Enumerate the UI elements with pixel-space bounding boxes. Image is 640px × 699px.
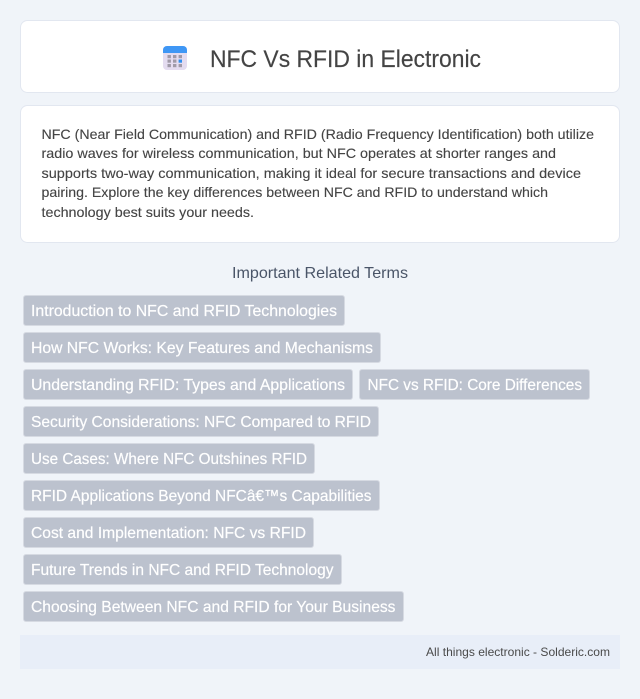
tag: how NFC works: How NFC Works: Key Features and Mechanisms xyxy=(31,340,373,357)
tag: choosing xyxy=(24,592,404,622)
heading: related terms: Important Related Terms xyxy=(232,265,408,282)
tag: introduction xyxy=(24,296,344,326)
tag: introduction: Introduction to NFC and RFID Technologies xyxy=(31,303,337,320)
tag: core differences: NFC vs RFID: Core Differences xyxy=(368,377,582,394)
tag: RFID applications xyxy=(24,480,380,510)
footer xyxy=(20,635,620,669)
intro text xyxy=(42,126,594,220)
intro text: NFC (Near Field Communication) and RFID (Radio Frequency Identification) both utilize xyxy=(42,126,594,142)
tag: future trends: Future Trends in NFC and RFID Technology xyxy=(31,562,334,579)
intro text: supports two-way communication, making it ideal for secure transactions and device xyxy=(42,165,581,181)
tag: cost xyxy=(24,518,314,548)
title: NFC Vs RFID in Electronic xyxy=(210,46,481,73)
icon: calendar xyxy=(163,46,187,70)
tag: future trends xyxy=(24,554,342,584)
intro text: pairing. Explore the key differences between NFC and RFID to understand which xyxy=(42,184,548,200)
tag: how NFC works xyxy=(24,332,380,362)
tag: choosing: Choosing Between NFC and RFID for Your Business xyxy=(31,599,396,616)
intro panel xyxy=(20,106,620,242)
related terms tags xyxy=(24,296,590,622)
tag: security: Security Considerations: NFC Compared to RFID xyxy=(31,414,371,431)
tag: cost: Cost and Implementation: NFC vs RFID xyxy=(31,525,306,542)
tag: RFID applications: RFID Applications Beyond NFCâ€™s Capabilities xyxy=(31,488,372,505)
tag: use cases: Use Cases: Where NFC Outshines RFID xyxy=(31,451,307,468)
tag: understanding RFID: Understanding RFID: Types and Applications xyxy=(31,377,345,394)
tag: core differences xyxy=(360,370,590,400)
tag: understanding RFID xyxy=(24,370,352,400)
header panel xyxy=(20,20,620,92)
footer text: All things electronic - Solderic.com xyxy=(426,645,610,659)
intro text: radio waves for wireless communication, but NFC operates at shorter ranges and xyxy=(42,145,556,161)
intro text: technology best suits your needs. xyxy=(42,204,254,220)
tag: security xyxy=(24,406,378,436)
tag: use cases xyxy=(24,444,314,474)
